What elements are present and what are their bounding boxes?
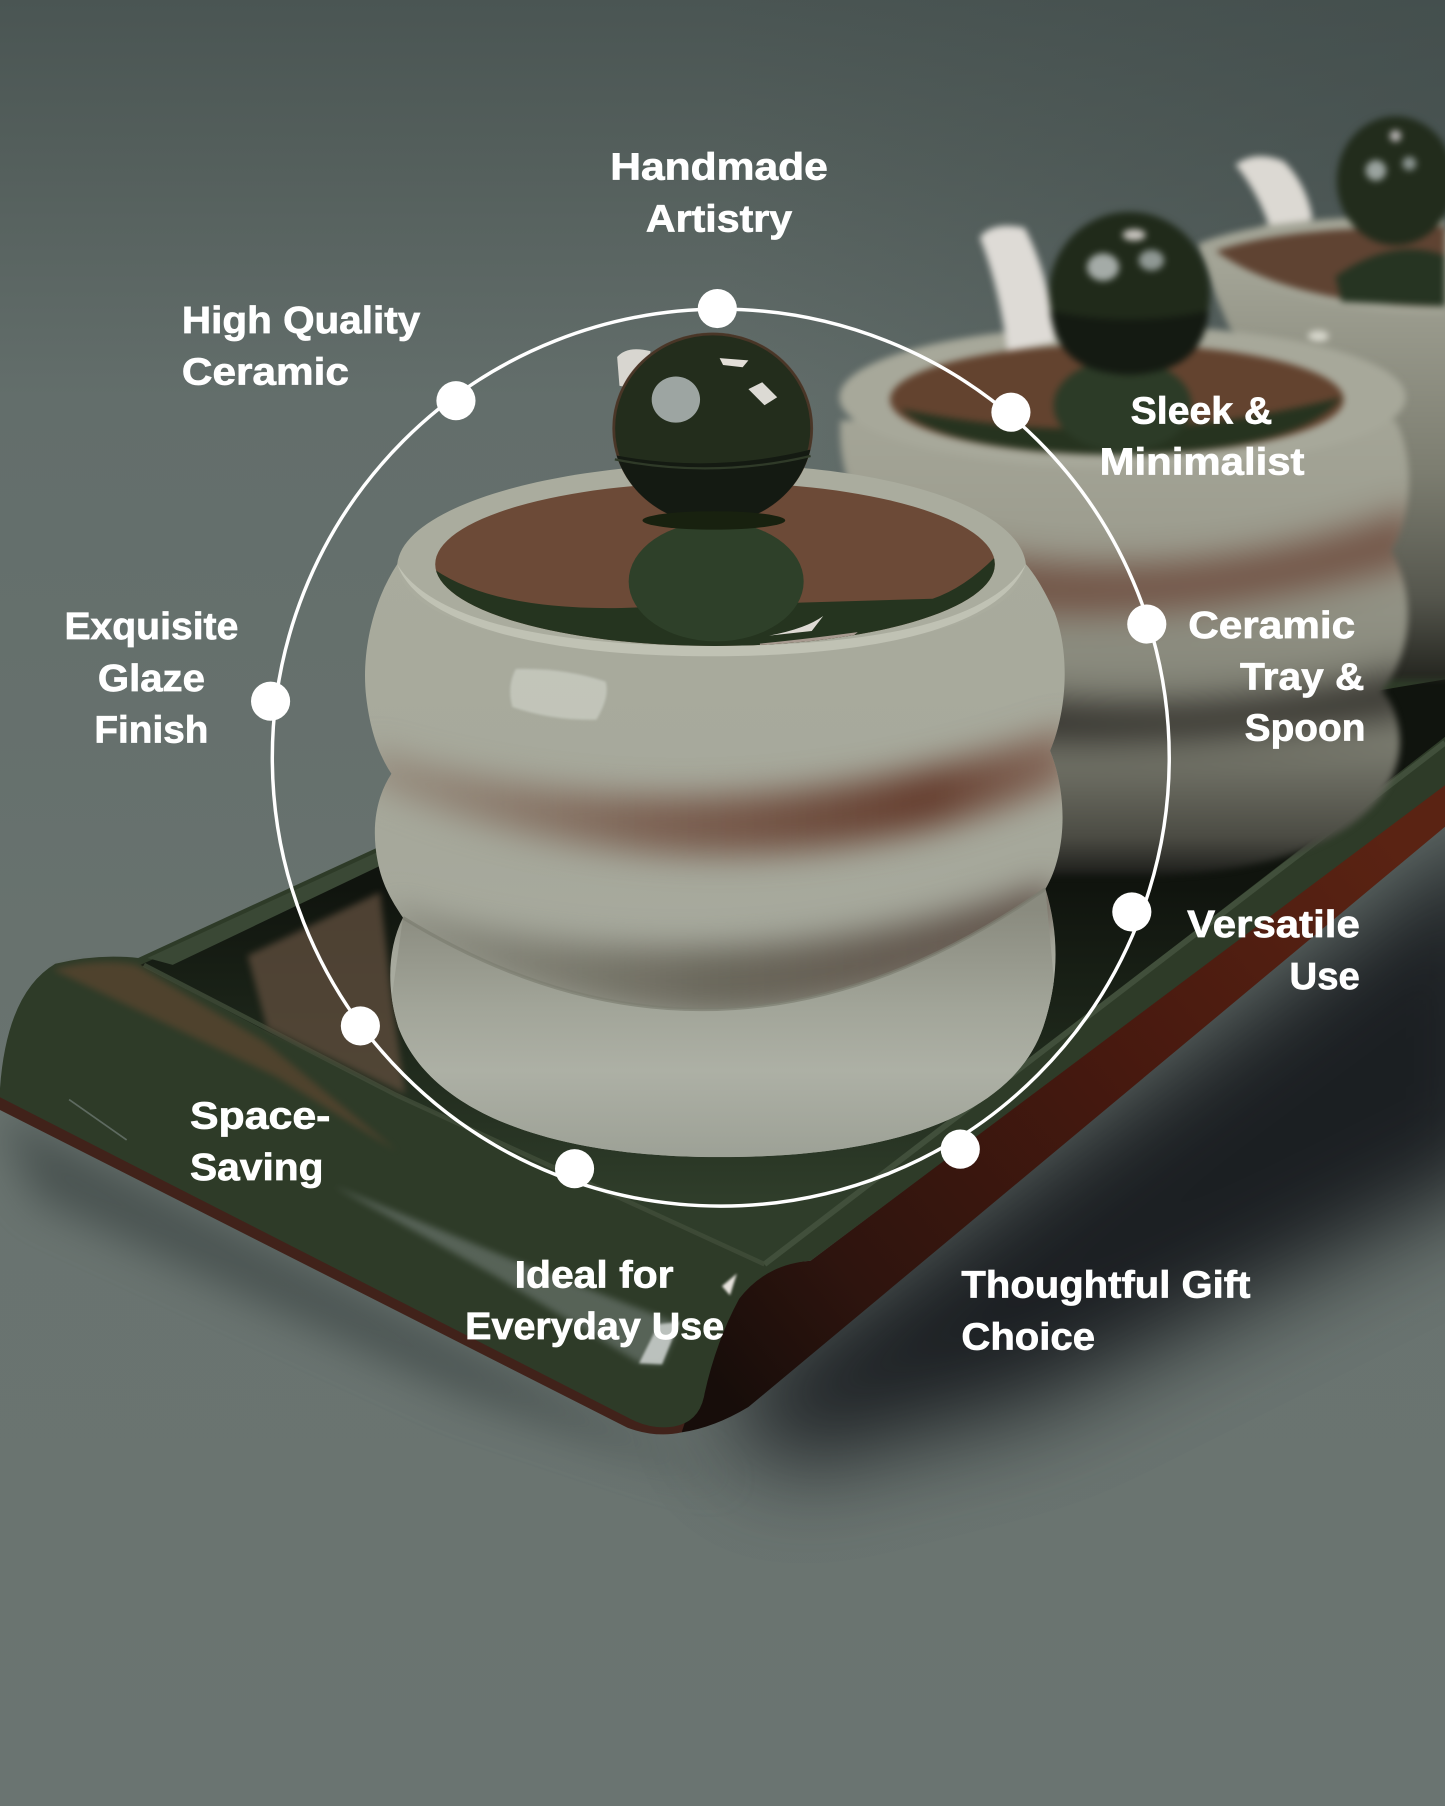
label: Versatile Use: Versatile xyxy=(1187,904,1360,946)
label: Handmade Artistry: Artistry xyxy=(646,198,792,240)
label: Exquisite Glaze Finish: Finish xyxy=(94,710,208,752)
label: Space-Saving xyxy=(190,1095,330,1189)
right inner wall edge xyxy=(765,743,1445,1264)
label: High Quality Ceramic xyxy=(182,300,420,394)
dot: Versatile Use xyxy=(1112,892,1151,931)
dot: Ceramic Tray and Spoon xyxy=(1127,604,1166,644)
label: Ideal for Everyday Use: Everyday Use xyxy=(465,1306,724,1348)
second jar (midground, blurred) xyxy=(829,212,1428,887)
ceramic tray xyxy=(0,662,1445,1434)
dot: High Quality Ceramic xyxy=(436,381,476,420)
tray top surface xyxy=(0,662,1445,1427)
label: Thoughtful Gift Choice xyxy=(961,1265,1251,1358)
label: Exquisite Glaze Finish xyxy=(64,606,238,752)
back wall strip xyxy=(147,852,380,965)
third jar knob xyxy=(1337,116,1445,245)
feature ring with dots xyxy=(251,289,1169,1206)
tray front edge xyxy=(0,1092,691,1434)
crease shading top / middle ring xyxy=(368,725,1071,855)
bowl glaze highlight xyxy=(510,669,607,720)
dot: Space-Saving xyxy=(341,1006,380,1045)
handle brown reflection xyxy=(53,962,397,1151)
brown reflection in well xyxy=(248,892,405,1094)
lower middle ring shading xyxy=(386,881,1054,1016)
jar body with three rings xyxy=(345,541,1082,1163)
label: Space-Saving: Space- xyxy=(190,1095,330,1137)
dot: Thoughtful Gift Choice xyxy=(941,1130,980,1169)
second jar knob xyxy=(1049,212,1210,375)
label: Ceramic Tray and Spoon xyxy=(1188,605,1366,749)
label: Space-Saving: Saving xyxy=(190,1147,324,1189)
third jar (background, blurred) xyxy=(1197,116,1445,679)
dot: Exquisite Glaze Finish xyxy=(251,682,290,721)
label: High Quality Ceramic: High Quality xyxy=(182,300,420,342)
label: Exquisite Glaze Finish: Exquisite xyxy=(64,606,238,648)
label: Sleek and Minimalist: Minimalist xyxy=(1100,441,1305,483)
white spoon tip behind knob xyxy=(617,349,651,391)
label: Versatile Use: Use xyxy=(1290,956,1360,998)
label: High Quality Ceramic: Ceramic xyxy=(182,352,349,394)
front jar rim xyxy=(397,464,1026,654)
label: Sleek and Minimalist xyxy=(1100,391,1305,483)
label: Ceramic Tray and Spoon: Ceramic xyxy=(1188,605,1355,647)
label: Sleek and Minimalist: Sleek & xyxy=(1131,391,1272,433)
label: Ideal for Everyday Use: Ideal for xyxy=(515,1254,674,1296)
second jar body xyxy=(836,416,1412,874)
label: Exquisite Glaze Finish: Glaze xyxy=(98,658,205,700)
ring xyxy=(272,309,1169,1206)
dot: Sleek and Minimalist xyxy=(991,393,1030,432)
label: Handmade Artistry xyxy=(610,147,828,240)
label: Ideal for Everyday Use xyxy=(465,1254,724,1348)
label: Handmade Artistry: Handmade xyxy=(610,147,828,189)
tray side face xyxy=(679,783,1445,1432)
front jar xyxy=(345,333,1082,1163)
tray inner well xyxy=(140,679,1445,1264)
tray glaze highlights xyxy=(334,1186,679,1364)
label: Thoughtful Gift Choice: Choice xyxy=(961,1316,1095,1358)
front wall edge xyxy=(144,965,765,1264)
second jar rim xyxy=(839,326,1406,469)
second jar spoon xyxy=(980,226,1055,351)
label: Ceramic Tray and Spoon: Spoon xyxy=(1245,707,1366,749)
label: Thoughtful Gift Choice: Thoughtful Gift xyxy=(961,1265,1251,1307)
dot: Handmade Artistry xyxy=(698,289,737,328)
front jar knob xyxy=(613,333,813,530)
front jar lid xyxy=(435,486,995,646)
label: Ceramic Tray and Spoon: Tray & xyxy=(1240,657,1364,699)
label: Versatile Use xyxy=(1187,904,1360,998)
bottom ring xyxy=(368,889,1071,1163)
third jar spoon xyxy=(1235,156,1313,236)
dot: Ideal for Everyday Use xyxy=(555,1149,594,1188)
